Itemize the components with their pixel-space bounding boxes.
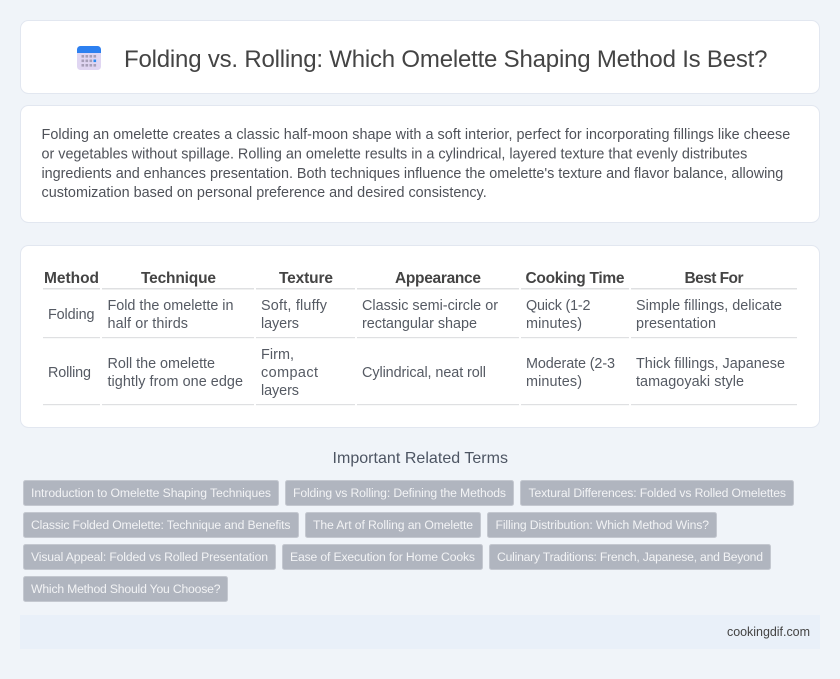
table row: folding: Classic semi-circle or: [362, 298, 498, 314]
footer: [20, 615, 820, 649]
tag: textural differences: Textural Differences: Folded vs Rolled Omelettes: [528, 486, 786, 500]
table header row: Method: [44, 270, 99, 287]
table header row: Cooking Time: [526, 270, 625, 287]
table row: folding: Soft, fluffy: [261, 298, 328, 314]
panel: related term tags: [24, 480, 794, 602]
table row: folding: half or thirds: [108, 316, 188, 332]
table header row: Texture: [279, 270, 333, 287]
table row: rolling: minutes): [526, 374, 582, 390]
text block: introduction paragraph: Folding an omelette creates a classic half-moon shape with a soft interior, perfect for incorporating fillings like cheese: [42, 127, 790, 143]
tag: introduction: Introduction to Omelette Shaping Techniques: [31, 486, 271, 500]
tag: textural differences: [520, 480, 794, 506]
table row: rolling: Cylindrical, neat roll: [362, 365, 486, 381]
icon: calendar: [77, 46, 101, 70]
table row: rolling: Firm,: [261, 347, 294, 363]
table row: rolling: Moderate (2-3: [526, 356, 615, 372]
table row: rolling: tightly from one edge: [108, 374, 243, 390]
tag: defining the methods: [286, 480, 514, 506]
tag: filling distribution: [488, 512, 716, 538]
title: Folding vs. Rolling: Which Omelette Shaping Method Is Best?: [124, 46, 768, 73]
tag: which method: Which Method Should You Choose?: [31, 582, 221, 596]
table row: rolling: compact: [261, 365, 318, 381]
table row: folding: Fold the omelette in: [108, 298, 234, 314]
tag: filling distribution: Filling Distribution: Which Method Wins?: [496, 518, 709, 532]
table row: rolling: [43, 347, 797, 405]
tag: introduction: [24, 480, 278, 506]
text block: introduction paragraph: ingredients and enhances presentation. Both techniques influence the omelette's texture and flavor balance, allowing: [42, 166, 783, 182]
table row: folding: Quick (1-2: [526, 298, 590, 314]
tag: culinary traditions: Culinary Traditions: French, Japanese, and Beyond: [497, 550, 763, 564]
panel: title card: [20, 20, 820, 94]
table row: folding: [43, 298, 797, 338]
tag: defining the methods: Folding vs Rolling: Defining the Methods: [293, 486, 506, 500]
table row: rolling: layers: [261, 383, 299, 399]
table row: folding: minutes): [526, 316, 582, 332]
table row: rolling: Thick fillings, Japanese: [636, 356, 785, 372]
tag: art of rolling: The Art of Rolling an Omelette: [313, 518, 473, 532]
table row: folding: Simple fillings, delicate: [636, 298, 782, 314]
panel: introduction: [20, 106, 820, 222]
tag: classic folded omelette: [24, 512, 298, 538]
tag: culinary traditions: [490, 544, 770, 570]
table row: rolling: Roll the omelette: [108, 356, 215, 372]
table row: folding: rectangular shape: [362, 316, 477, 332]
text block: introduction paragraph: customization based on personal preference and desired consistency.: [42, 185, 487, 201]
panel: comparison table: [20, 246, 820, 428]
text block: introduction paragraph: [42, 127, 790, 201]
text block: introduction paragraph: or vegetables without spillage. Rolling an omelette results in a cylindrical, layered texture that evenly distributes: [42, 146, 747, 162]
tag: visual appeal: [24, 544, 276, 570]
table row: rolling: Rolling: [48, 365, 91, 381]
tag: visual appeal: Visual Appeal: Folded vs Rolled Presentation: [31, 550, 268, 564]
table row: rolling: tamagoyaki style: [636, 374, 744, 390]
table row: folding: presentation: [636, 316, 716, 332]
table row: folding: Folding: [48, 307, 94, 323]
table row: folding: layers: [261, 316, 299, 332]
table header row: [43, 270, 797, 290]
tag: which method: [24, 576, 228, 602]
table header row: Best For: [684, 270, 744, 287]
tag: ease of execution: [282, 544, 482, 570]
table header row: Appearance: [395, 270, 481, 287]
footer source text: cookingdif.com: [727, 625, 810, 639]
tag: ease of execution: Ease of Execution for Home Cooks: [290, 550, 475, 564]
tag: art of rolling: [306, 512, 480, 538]
tag: classic folded omelette: Classic Folded Omelette: Technique and Benefits: [31, 518, 290, 532]
table header row: Technique: [141, 270, 216, 287]
heading: related terms: Important Related Terms: [332, 450, 508, 467]
